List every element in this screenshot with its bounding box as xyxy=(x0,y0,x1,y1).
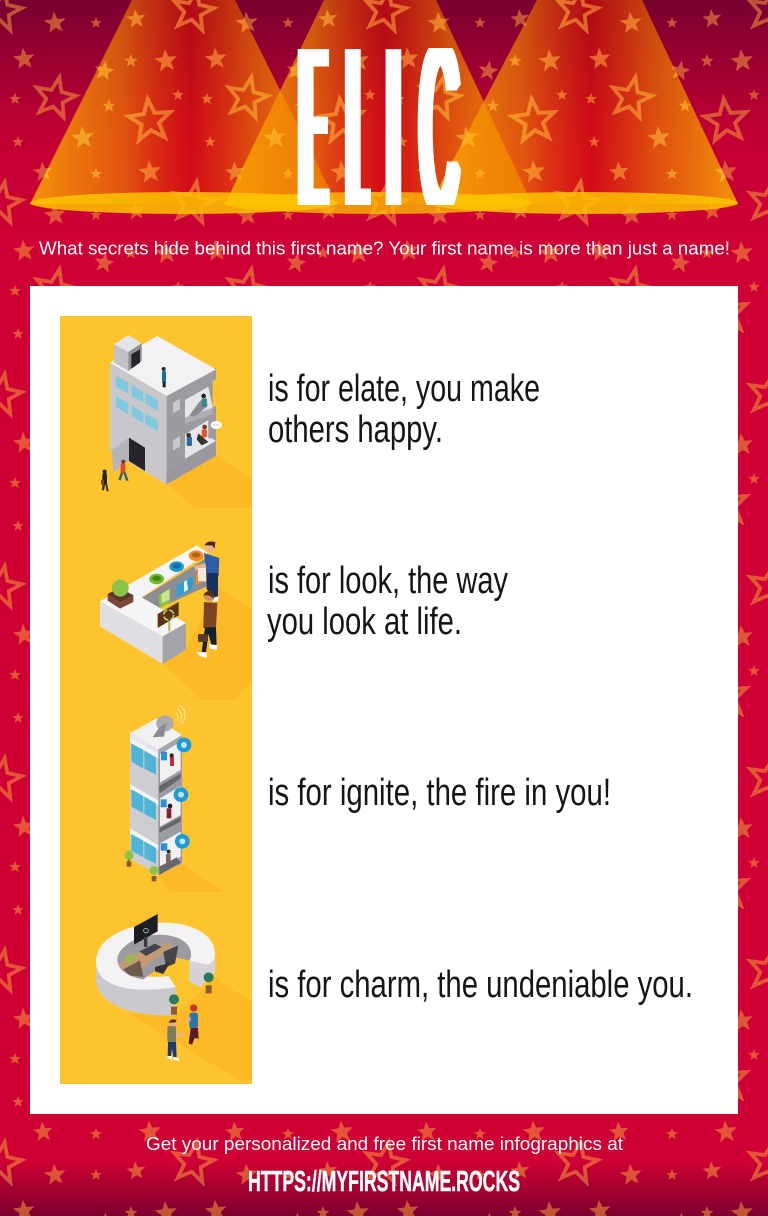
icon: reception desk xyxy=(96,914,252,1081)
text row 2: you look at life. xyxy=(267,601,462,643)
text row 2: is for look, the way xyxy=(268,560,508,602)
text row 3: is for ignite, the fire in you! xyxy=(268,772,611,814)
panel: white card xyxy=(30,286,738,1114)
icon: office building xyxy=(101,335,252,508)
footer line: Get your personalized and free first name infographics at xyxy=(146,1134,623,1154)
text row 1 xyxy=(268,368,540,451)
text row 1: others happy. xyxy=(268,409,443,451)
title xyxy=(298,48,462,205)
icon: recycling counter xyxy=(100,541,252,700)
subtitle: What secrets hide behind this first name? Your first name is more than just a name! xyxy=(39,238,730,258)
spotlights xyxy=(0,0,768,214)
footer url: HTTPS://MYFIRSTNAME.ROCKS xyxy=(248,1166,520,1198)
text row 2 xyxy=(267,560,508,643)
icon: telecom tower xyxy=(125,705,223,892)
text row 1: is for elate, you make xyxy=(268,368,540,410)
illustration column xyxy=(60,316,252,1084)
